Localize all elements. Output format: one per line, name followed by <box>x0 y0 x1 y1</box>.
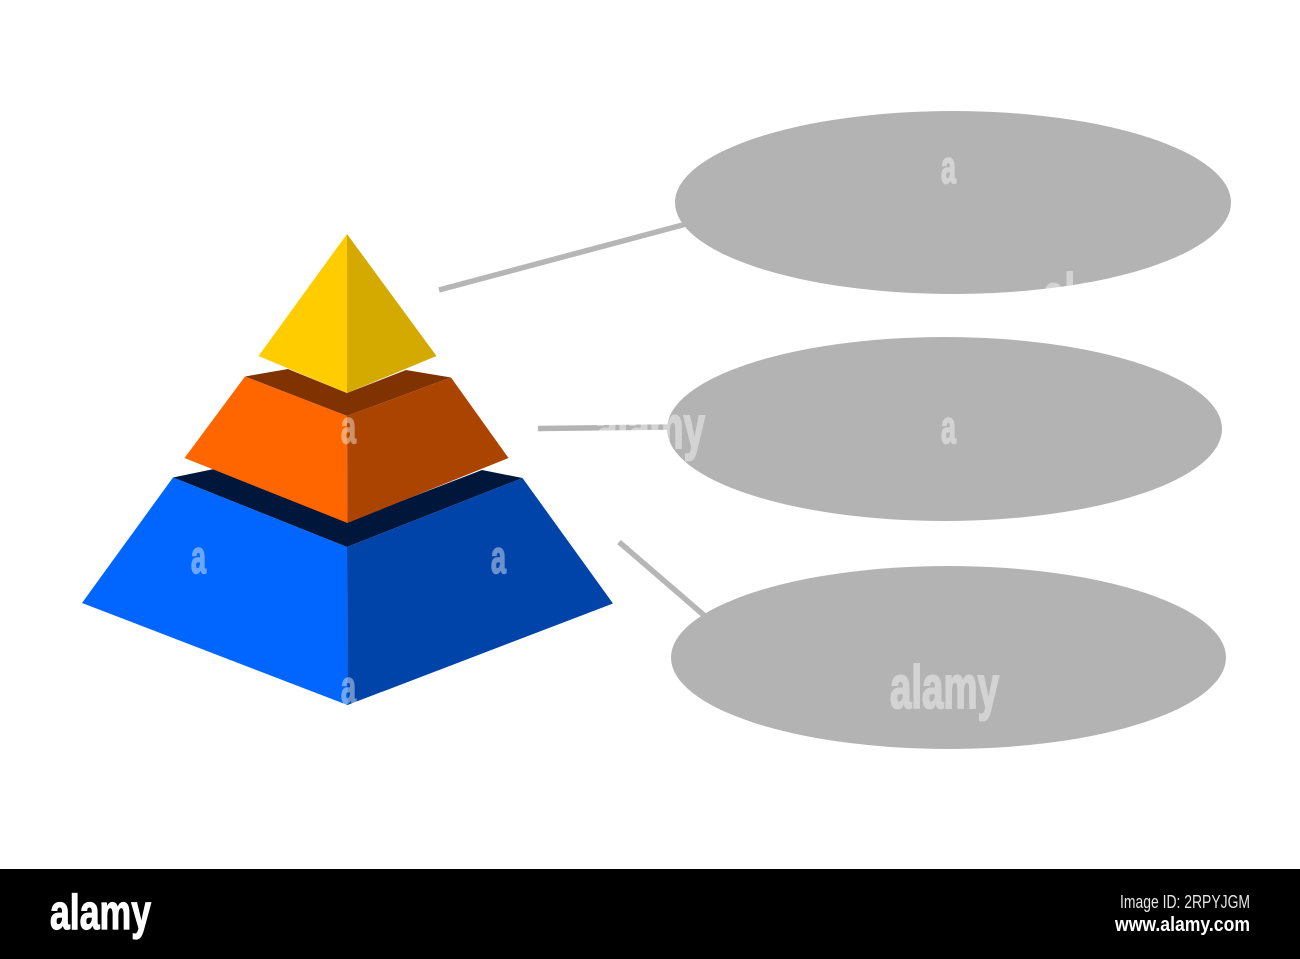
watermark letters: a <box>491 531 506 583</box>
watermark letters: a <box>941 141 956 193</box>
website: www.alamy.com <box>1114 914 1250 936</box>
orange tier <box>184 369 508 523</box>
ellipse: middle label <box>667 337 1222 521</box>
watermark letters <box>191 141 956 713</box>
watermark letters: a <box>191 531 206 583</box>
watermark letters: a <box>341 661 356 713</box>
connector: top ellipse to pyramid tip <box>439 223 690 290</box>
watermark letters: a <box>341 401 356 453</box>
pyramid <box>82 234 613 705</box>
watermark word: bottom ellipse: alamy <box>890 654 999 721</box>
yellow tier <box>258 234 436 393</box>
watermark word: top ellipse edge: alamy <box>1043 262 1152 329</box>
image id: Image ID: 2RPYJGM <box>1120 892 1250 912</box>
watermark word: middle connector: alamy <box>596 394 705 461</box>
connector: bottom ellipse to blue tier <box>619 542 706 617</box>
ellipse: bottom label <box>671 566 1226 749</box>
connector: middle ellipse to orange tier <box>538 427 718 428</box>
blue tier <box>82 469 613 705</box>
watermark letters: a <box>941 401 956 453</box>
ellipse: top label <box>675 111 1231 294</box>
footer bar <box>0 869 1300 959</box>
footer logo: alamy <box>50 886 151 940</box>
